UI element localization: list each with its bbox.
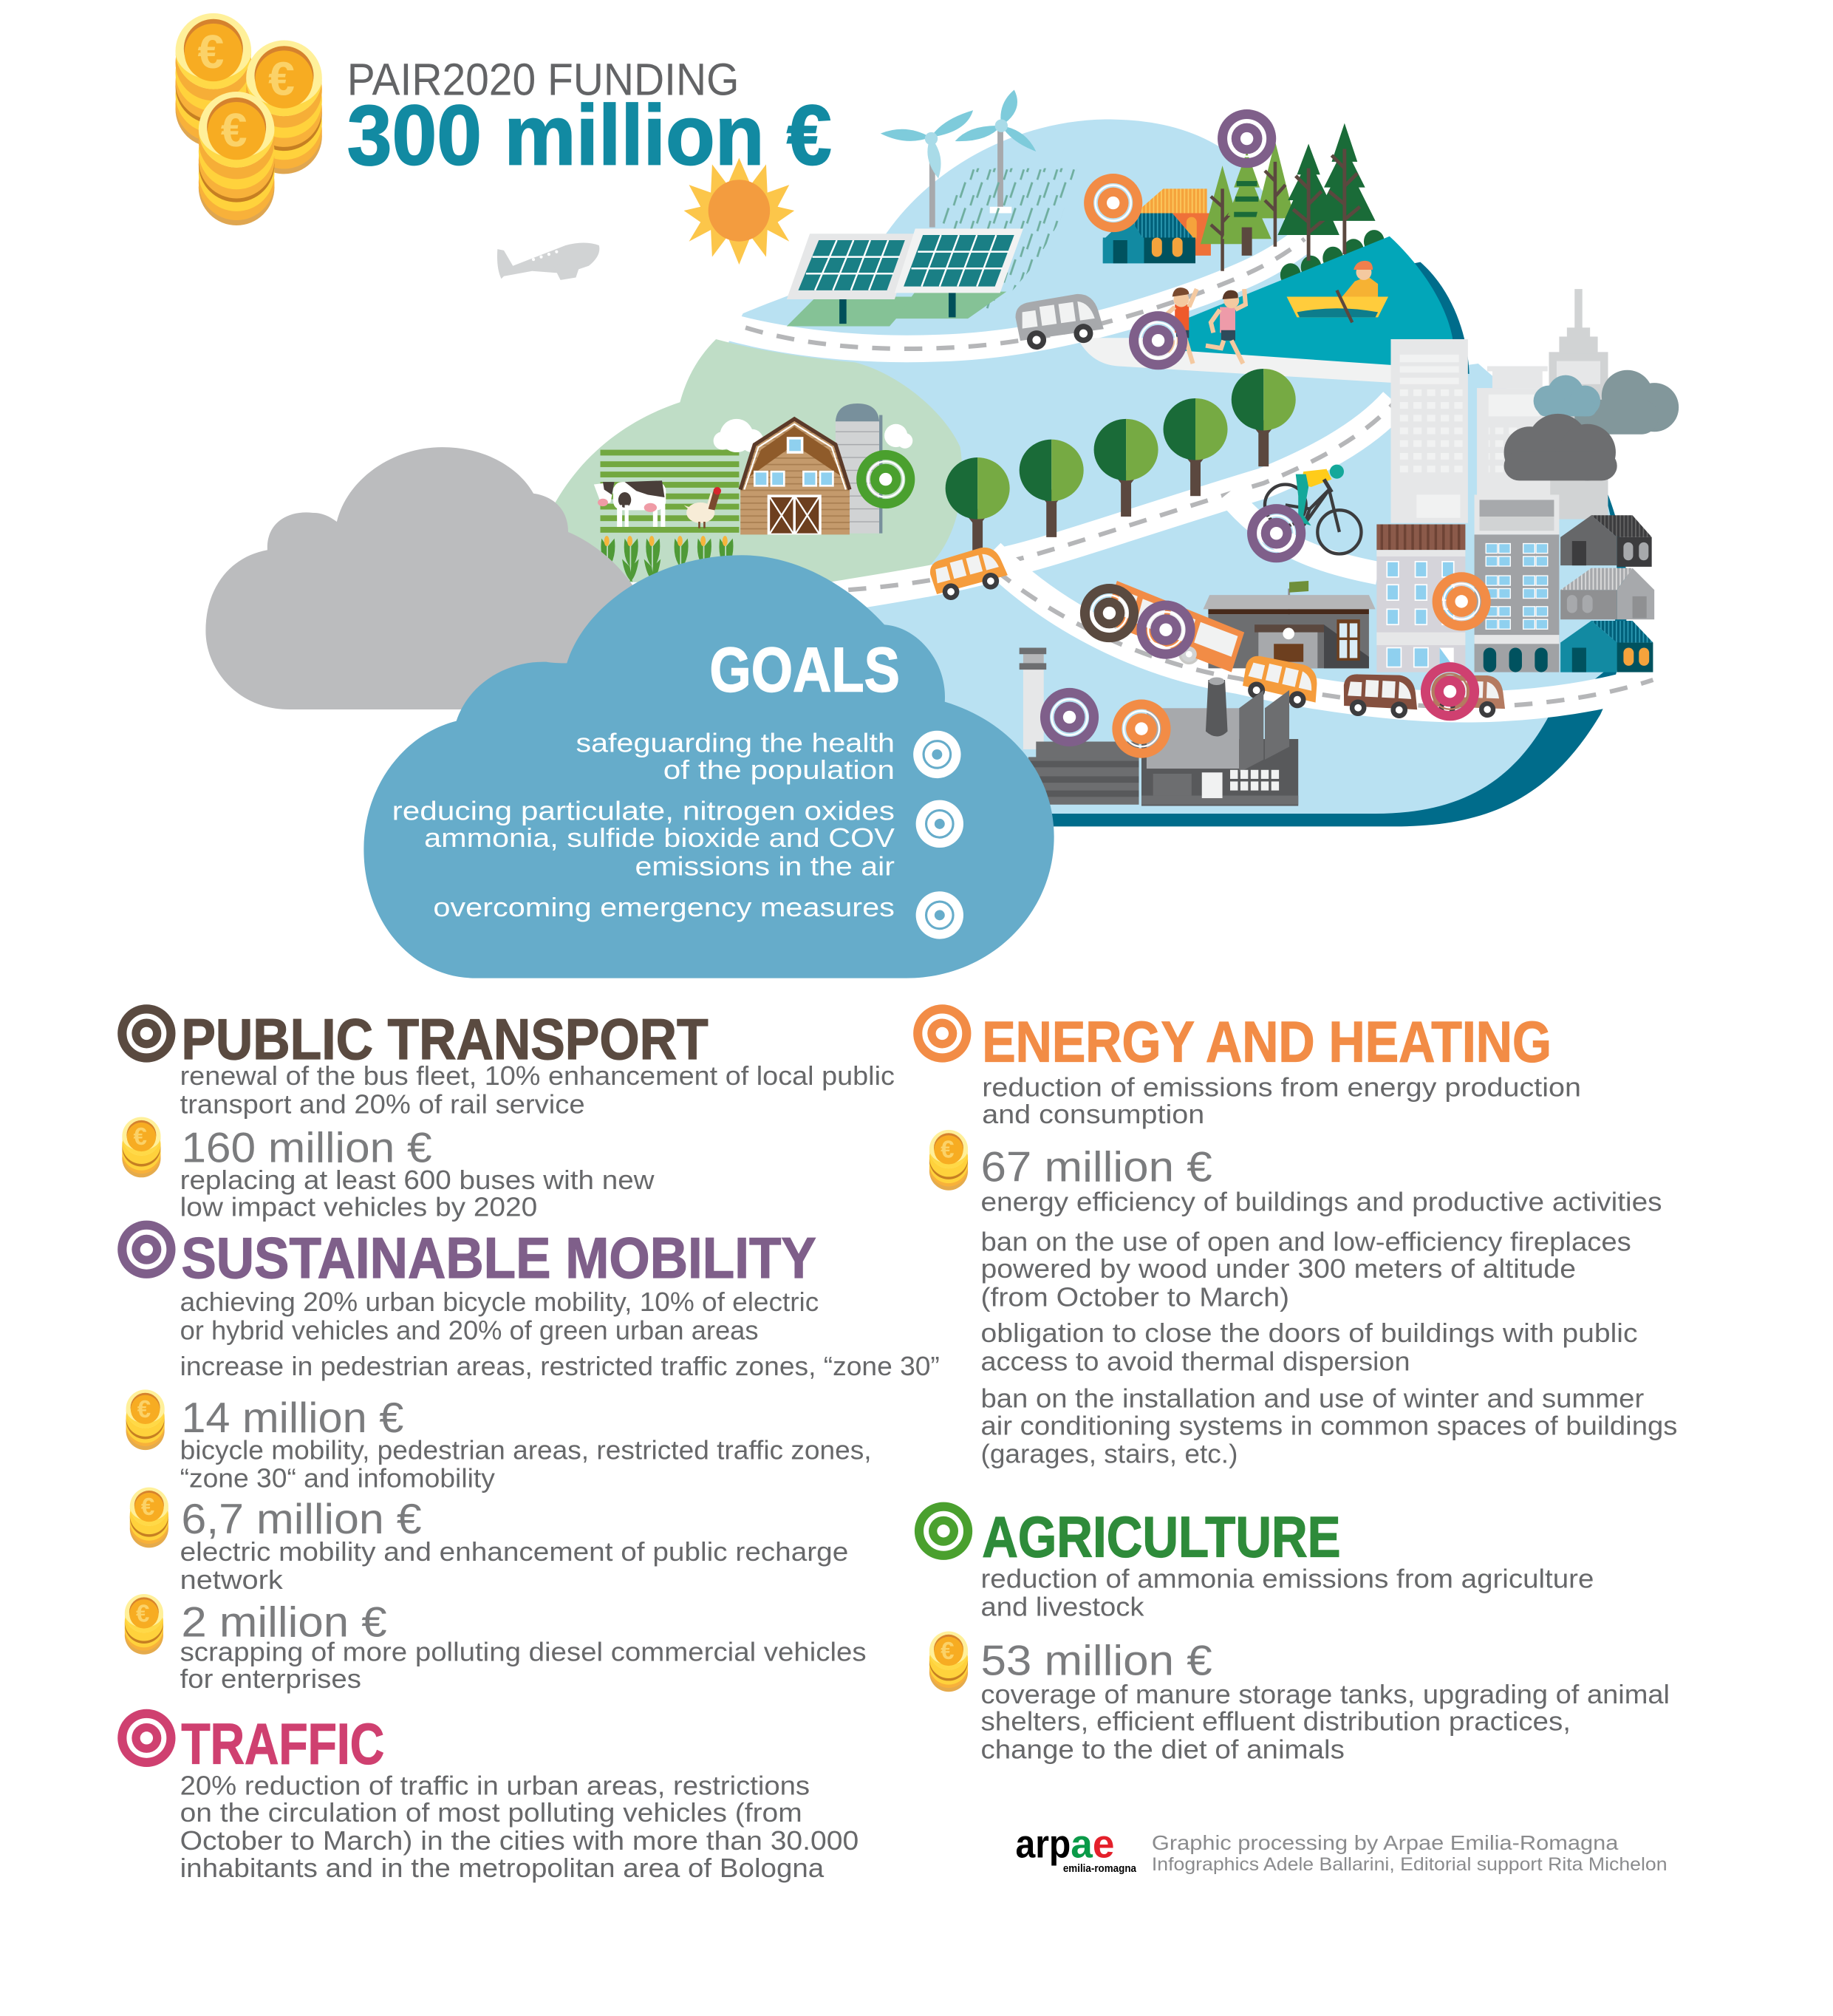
cyclist — [1265, 465, 1361, 554]
description: or hybrid vehicles and 20% of green urban areas — [180, 1315, 759, 1346]
detail: change to the diet of animals — [980, 1734, 1345, 1765]
farm: fields — [601, 450, 739, 533]
icon: coins — [929, 1130, 968, 1191]
factory — [1020, 648, 1298, 806]
icon: agriculture target — [919, 1507, 968, 1556]
goal 3 icon — [916, 891, 963, 939]
description: reduction of ammonia emissions from agriculture — [980, 1563, 1594, 1593]
section: traffic — [122, 1712, 859, 1883]
description — [180, 1060, 895, 1119]
goals heading: GOALS — [709, 636, 900, 706]
detail: shelters, efficient effluent distribution practices, — [980, 1706, 1571, 1736]
description: and livestock — [980, 1592, 1144, 1622]
row of three houses — [1560, 515, 1654, 672]
description: October to March) in the cities with more than 30.000 — [180, 1825, 859, 1856]
description: transport and 20% of rail service — [180, 1089, 585, 1119]
description: achieving 20% urban bicycle mobility, 10% of electric — [180, 1287, 819, 1317]
details: air conditioning systems in common spaces of buildings — [980, 1410, 1677, 1440]
detail: coverage of manure storage tanks, upgrading of animal — [980, 1679, 1670, 1709]
detail — [980, 1679, 1670, 1765]
details: access to avoid thermal dispersion — [980, 1346, 1410, 1376]
amount: 6,7 million € — [181, 1496, 422, 1543]
wind turbines — [881, 89, 1036, 228]
white clouds behind barn — [714, 419, 912, 452]
heading: SUSTAINABLE MOBILITY — [181, 1225, 816, 1290]
logo: arpae: emilia-romagna — [1063, 1863, 1137, 1875]
detail — [180, 1536, 848, 1595]
solar panels — [787, 228, 1023, 327]
details: (from October to March) — [980, 1281, 1289, 1312]
details: energy efficiency of buildings and productive activities — [980, 1187, 1662, 1217]
description — [180, 1770, 859, 1883]
description: increase in pedestrian areas, restricted traffic zones, “zone 30” — [180, 1351, 940, 1381]
light brown bus — [1432, 673, 1506, 718]
icon: coins — [122, 1117, 161, 1177]
heading: AGRICULTURE — [982, 1505, 1341, 1570]
description — [982, 1072, 1581, 1129]
details: ban on the installation and use of winter and summer — [980, 1383, 1644, 1414]
brick building — [1376, 524, 1465, 672]
section: public transport — [122, 1007, 895, 1222]
barn — [740, 419, 850, 534]
icon: coins — [929, 1631, 968, 1692]
icon: mobility target — [122, 1225, 171, 1274]
avenue trees — [946, 369, 1296, 555]
goal 1 text: of the population — [663, 755, 895, 785]
sun — [684, 158, 794, 265]
detail: electric mobility and enhancement of public recharge — [180, 1536, 848, 1567]
icon: coins — [125, 1594, 163, 1655]
runners — [1159, 287, 1246, 364]
amount: 67 million € — [980, 1144, 1212, 1191]
goal 1 text: safeguarding the health — [576, 727, 895, 757]
logo: arpae: arp — [1015, 1822, 1071, 1867]
detail: for enterprises — [180, 1663, 361, 1694]
goal 2 text: ammonia, sulfide bioxide and COV — [424, 823, 895, 853]
hen — [684, 487, 721, 528]
detail — [180, 1434, 872, 1494]
funding amount: 300 million € — [347, 88, 832, 183]
scene target markers — [861, 114, 1486, 753]
description: inhabitants and in the metropolitan area of Bologna — [180, 1853, 825, 1883]
credits — [1152, 1831, 1668, 1875]
roads — [726, 239, 1653, 707]
icon: public transport target — [122, 1009, 171, 1058]
silo — [836, 403, 882, 534]
gray apartment building — [1475, 494, 1559, 672]
heading: PUBLIC TRANSPORT — [181, 1007, 709, 1072]
goal 3 text: overcoming emergency measures — [433, 892, 895, 922]
logo: arpae: a — [1071, 1822, 1093, 1867]
goal 2 text: reducing particulate, nitrogen oxides — [392, 796, 895, 826]
lake — [1077, 230, 1470, 383]
school building — [1203, 581, 1376, 668]
heading: TRAFFIC — [181, 1712, 384, 1777]
goal 2 text: emissions in the air — [635, 851, 895, 881]
section: energy and heating — [918, 1009, 1677, 1469]
small orange bus — [927, 543, 1010, 604]
title: PAIR2020 FUNDING — [347, 54, 739, 104]
small clouds over the city — [1504, 370, 1679, 480]
description: and consumption — [982, 1099, 1204, 1129]
detail: “zone 30“ and infomobility — [180, 1463, 496, 1494]
icon: coins — [130, 1488, 168, 1547]
icon: traffic target — [122, 1714, 171, 1763]
goal 1 icon — [913, 731, 961, 778]
detail: replacing at least 600 buses with new — [180, 1165, 655, 1195]
goal 2 text — [392, 796, 895, 881]
brown bus — [1342, 672, 1419, 719]
details: powered by wood under 300 meters of altitude — [980, 1253, 1576, 1284]
logo: arpae: e — [1093, 1822, 1114, 1867]
landscape background — [556, 119, 1628, 826]
details: (garages, stairs, etc.) — [980, 1439, 1238, 1469]
detail: network — [180, 1564, 284, 1595]
icon: energy target — [918, 1009, 966, 1058]
goals cloud panel — [363, 555, 1054, 978]
amount: 53 million € — [980, 1638, 1212, 1685]
logo: arpae — [1015, 1822, 1137, 1875]
solar field dashes — [938, 168, 1077, 310]
rower in boat — [1287, 261, 1388, 322]
amount: 160 million € — [181, 1124, 432, 1171]
detail — [180, 1636, 867, 1694]
detail: scrapping of more polluting diesel commercial vehicles — [180, 1636, 867, 1666]
description — [980, 1563, 1594, 1622]
description — [180, 1287, 940, 1381]
section: sustainable mobility — [122, 1225, 940, 1694]
corn plants — [599, 536, 733, 582]
credits: Graphic processing by Arpae Emilia-Romagna — [1152, 1831, 1619, 1854]
title — [347, 54, 832, 183]
goal 2 icon — [916, 800, 963, 848]
description: on the circulation of most polluting vehicles (from — [180, 1797, 802, 1828]
credits: Infographics Adele Ballarini, Editorial support Rita Michelon — [1152, 1854, 1668, 1875]
amount: 14 million € — [181, 1394, 403, 1442]
description: reduction of emissions from energy production — [982, 1072, 1581, 1103]
gray cloud — [205, 447, 649, 709]
big orange bus — [1103, 581, 1244, 672]
description: 20% reduction of traffic in urban areas, restrictions — [180, 1770, 810, 1800]
coin stacks: main — [176, 13, 322, 225]
detail: bicycle mobility, pedestrian areas, restricted traffic zones, — [180, 1434, 872, 1465]
gray bus — [1014, 291, 1105, 352]
cow — [594, 480, 666, 527]
heading: ENERGY AND HEATING — [982, 1009, 1552, 1075]
details: ban on the use of open and low-efficiency fireplaces — [980, 1226, 1631, 1256]
description: renewal of the bus fleet, 10% enhancement of local public — [180, 1060, 895, 1091]
detail — [180, 1165, 655, 1222]
back city buildings — [1390, 289, 1608, 523]
details — [980, 1187, 1677, 1469]
orange bus — [1239, 653, 1323, 712]
plane — [497, 242, 599, 280]
details: obligation to close the doors of buildings with public — [980, 1318, 1638, 1348]
section: agriculture — [919, 1505, 1670, 1765]
goal 1 text — [576, 727, 895, 785]
icon: coins — [126, 1389, 165, 1450]
amount: 2 million € — [181, 1598, 387, 1646]
houses on the hill — [1103, 188, 1211, 263]
detail: low impact vehicles by 2020 — [180, 1191, 537, 1222]
pine trees — [1201, 123, 1376, 271]
